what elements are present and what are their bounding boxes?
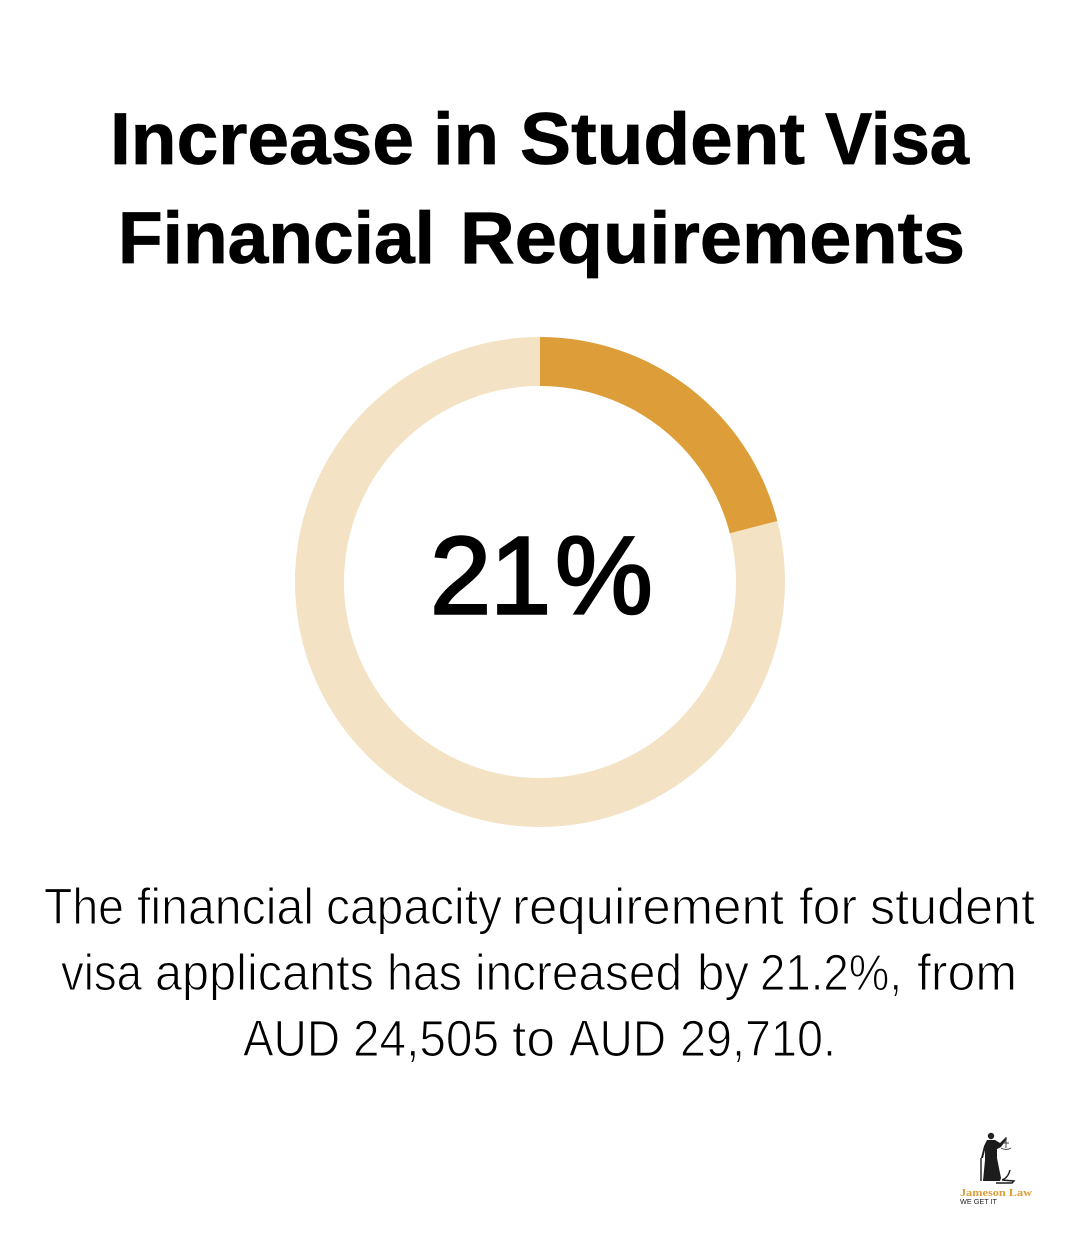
description text: for bbox=[799, 878, 857, 935]
description text: capacity bbox=[326, 878, 502, 935]
logo: Jameson Law bbox=[960, 1133, 1032, 1206]
description text: applicants bbox=[155, 944, 374, 1001]
title: in bbox=[433, 99, 499, 180]
title: Increase bbox=[110, 99, 414, 180]
logo name: Jameson Law bbox=[960, 1188, 1032, 1199]
description text: AUD bbox=[569, 1010, 666, 1067]
description text: requirement bbox=[512, 878, 784, 935]
description text: increased bbox=[475, 944, 682, 1001]
title: Visa bbox=[825, 99, 970, 180]
description text: by bbox=[697, 944, 749, 1001]
donut value: 21% bbox=[430, 514, 653, 638]
description text: has bbox=[387, 944, 462, 1001]
description text: 29,710. bbox=[680, 1010, 836, 1067]
donut track bbox=[320, 362, 760, 802]
description text: student bbox=[870, 878, 1035, 935]
description text: financial bbox=[137, 878, 314, 935]
description text: to bbox=[512, 1010, 555, 1067]
description text bbox=[44, 878, 1035, 1067]
title: Financial bbox=[118, 198, 435, 279]
description text: The bbox=[44, 878, 124, 935]
description text: from bbox=[917, 944, 1017, 1001]
icon: lady justice bbox=[981, 1133, 1014, 1183]
title bbox=[110, 99, 970, 279]
logo tagline: WE GET IT bbox=[960, 1199, 998, 1206]
donut segment bbox=[540, 337, 777, 533]
title: Requirements bbox=[460, 198, 965, 279]
description text: 21.2%, bbox=[760, 944, 902, 1001]
description text: visa bbox=[61, 944, 143, 1001]
description text: AUD bbox=[243, 1010, 340, 1067]
description text: 24,505 bbox=[353, 1010, 499, 1067]
title: Student bbox=[520, 99, 805, 180]
donut chart: 21% bbox=[320, 337, 777, 802]
